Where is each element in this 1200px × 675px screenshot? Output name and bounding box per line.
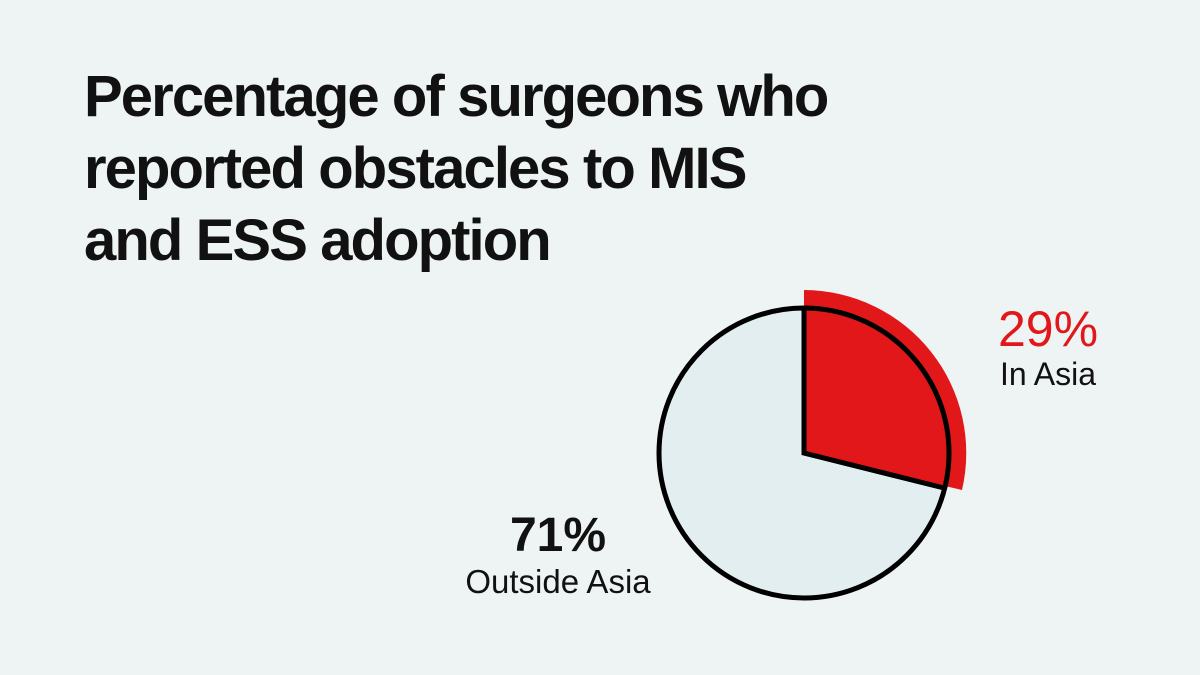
label: 71% Outside Asia xyxy=(465,509,651,600)
label: 29% In Asia: In Asia xyxy=(1000,356,1096,392)
label: 29% In Asia xyxy=(998,301,1098,392)
title: Percentage of surgeons who xyxy=(84,64,827,129)
label: 71% Outside Asia: 71% xyxy=(510,509,606,562)
title xyxy=(84,64,828,273)
label: 71% Outside Asia: Outside Asia xyxy=(465,563,651,600)
label: 29% In Asia: 29% xyxy=(998,301,1098,357)
red slice: in Asia xyxy=(804,290,966,490)
title: reported obstacles to MIS xyxy=(84,136,746,201)
title: and ESS adoption xyxy=(84,208,550,273)
